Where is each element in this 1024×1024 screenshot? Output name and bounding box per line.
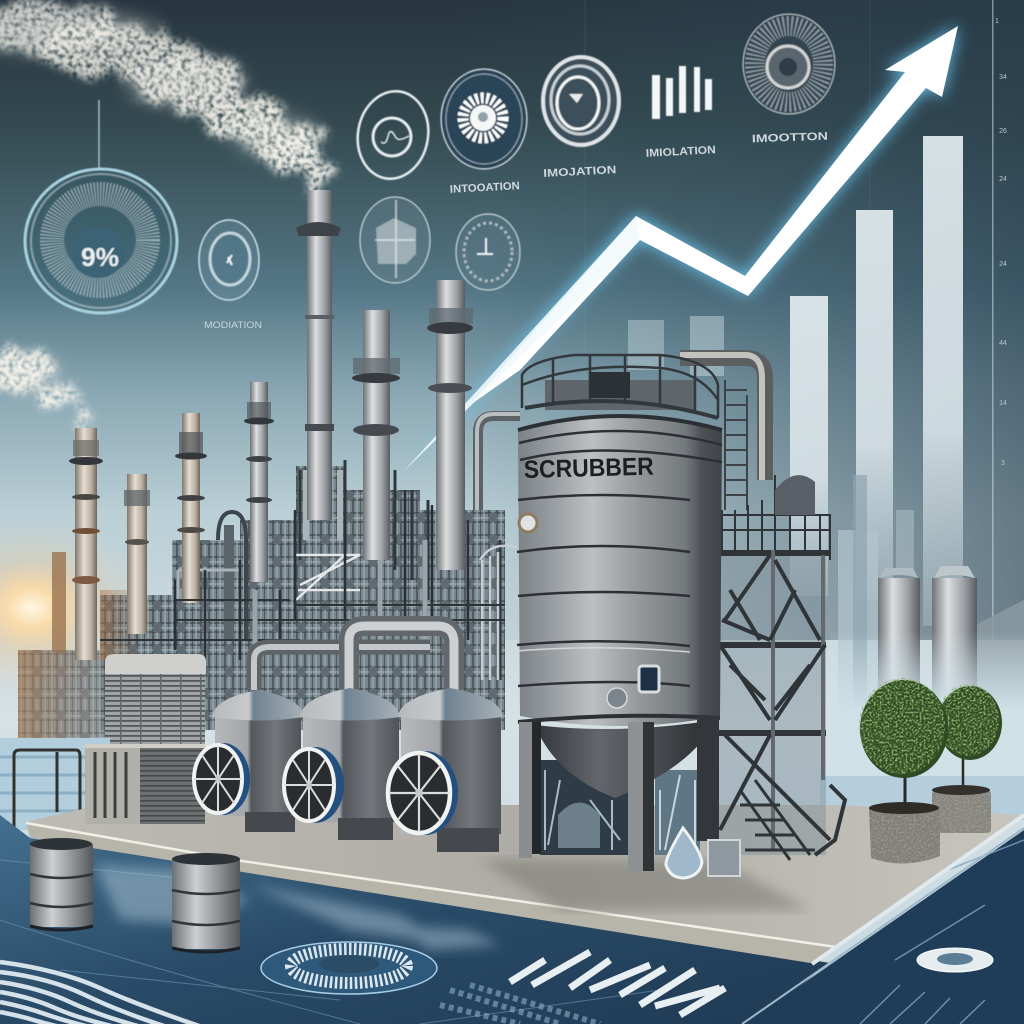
growth arrow <box>403 26 958 472</box>
axis tick labels right edge: 44 <box>999 340 1007 347</box>
icon labels: IMOJATION <box>543 164 617 180</box>
icon labels: IMIOLATION <box>646 144 716 160</box>
icon: dotted disc <box>743 14 835 114</box>
icon: ring with swirl <box>351 86 435 184</box>
side riser <box>690 490 700 690</box>
floor glyph blocks <box>440 985 600 1024</box>
background chart bars <box>628 0 994 690</box>
gauge value: 9% <box>81 242 119 272</box>
stack 4 <box>244 382 274 582</box>
stack 1 <box>69 428 103 660</box>
axis tick labels right edge: 24 <box>999 176 1007 183</box>
icon: sunburst <box>441 69 527 169</box>
distant skyline and tanks <box>820 475 1024 820</box>
vessel 3 <box>388 688 503 852</box>
stack 7 <box>427 280 473 570</box>
top railing deck <box>522 354 718 418</box>
barrel right <box>172 853 240 952</box>
side feed pipe <box>477 414 520 510</box>
stack 6 <box>352 310 400 560</box>
vessel 1 <box>194 690 304 832</box>
axis tick labels right edge: 34 <box>999 74 1007 81</box>
under-tank machinery <box>540 760 700 855</box>
right panel line work <box>860 840 1024 1024</box>
dense piping in front of stacks <box>100 490 505 660</box>
blueprint floor <box>0 815 1024 1024</box>
meter box <box>708 840 740 876</box>
floor stripe chart <box>510 952 725 1015</box>
scrubber vessel <box>517 354 740 878</box>
valve <box>607 688 627 708</box>
icon labels: IMOOTTON <box>752 131 828 145</box>
stack 2 <box>124 474 150 634</box>
process towers <box>178 460 518 680</box>
barrel left <box>30 838 93 930</box>
floor ring <box>261 942 437 994</box>
rear ladder and access tower <box>680 355 845 860</box>
axis tick labels right edge: 1 <box>995 18 999 25</box>
icon: glass clock <box>456 214 520 290</box>
fan vessels <box>194 688 503 852</box>
connecting pipes <box>254 626 454 690</box>
gauge: percentage <box>25 100 177 313</box>
axis tick labels right edge: 3 <box>1001 460 1005 467</box>
label SCRUBBER: SCRUBBER <box>523 453 654 484</box>
slatted tank <box>105 654 206 746</box>
overhead duct <box>680 355 765 480</box>
concrete platform <box>26 805 1024 1024</box>
ladder <box>725 380 747 510</box>
water drop icon <box>666 828 702 878</box>
icon: bar chart <box>652 66 712 119</box>
smoke plumes <box>0 1 331 423</box>
axis tick labels right edge: 14 <box>999 400 1007 407</box>
icon labels: INTOOATION <box>450 180 520 196</box>
tank legs <box>519 722 532 858</box>
vessel 2 <box>284 688 400 840</box>
utility box <box>85 744 205 824</box>
refinery lattice backdrop <box>18 460 518 745</box>
small gauge label: MODIATION <box>204 320 262 330</box>
control panel <box>639 666 659 692</box>
porthole <box>519 514 537 532</box>
chimney stacks <box>69 190 473 660</box>
smoke haze <box>0 10 320 388</box>
floor highlight patches <box>95 865 500 950</box>
tree left with pot <box>859 678 948 864</box>
foreground left railing and sea <box>0 738 110 830</box>
equipment on deck <box>590 372 630 398</box>
axis tick labels right edge: 26 <box>999 128 1007 135</box>
icon: concentric rings <box>543 57 619 145</box>
tank cone <box>535 720 715 798</box>
tank bands <box>517 416 722 722</box>
tree right with pot <box>932 684 1002 833</box>
stack 5 tall <box>296 190 341 520</box>
axis tick labels right edge: 24 <box>999 261 1007 268</box>
tank shell <box>518 416 722 726</box>
axis tick labels right edge <box>995 18 1007 467</box>
small gauge icon <box>199 220 259 300</box>
tower frame <box>708 475 845 860</box>
icon: glass machine <box>360 197 430 283</box>
floor wave stripes <box>0 962 205 1024</box>
stack 3 <box>175 413 207 603</box>
icon labels <box>450 131 828 196</box>
